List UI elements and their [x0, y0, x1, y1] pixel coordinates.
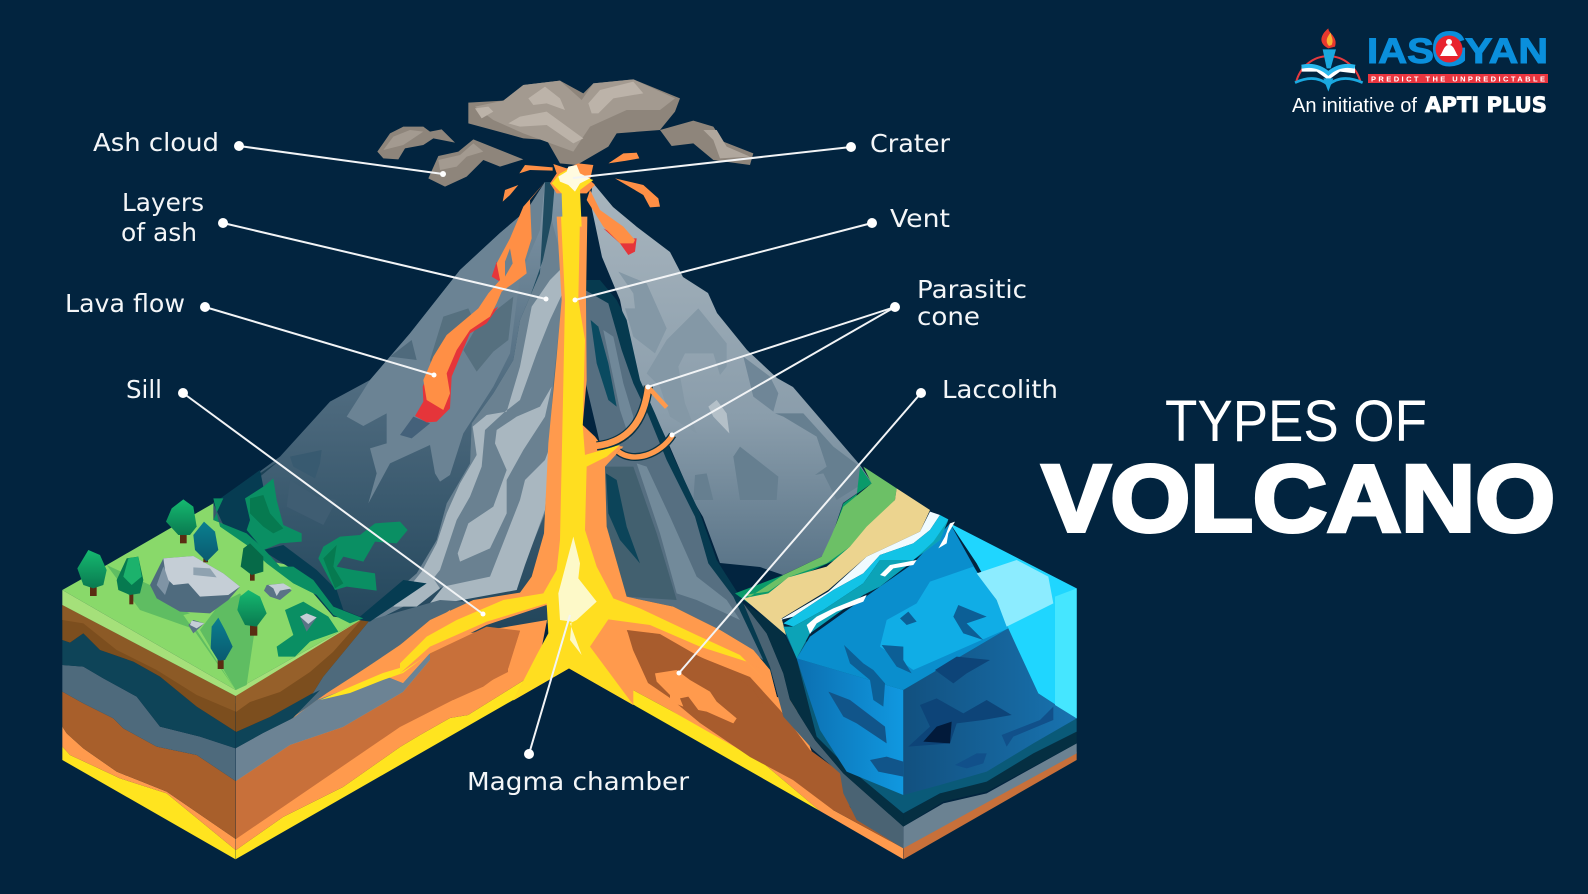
- left block: left face layers: [62, 605, 236, 859]
- logo: IAS GYAN: YAN: [1465, 32, 1548, 71]
- dark sea floor shapes: [908, 698, 1012, 747]
- label: Lava flow: [65, 289, 436, 378]
- label: Magma chamber: [467, 615, 690, 796]
- title: [1042, 389, 1555, 552]
- white chamber core: [558, 537, 597, 655]
- ash clouds: [377, 79, 753, 187]
- right block: right face layers: [569, 598, 903, 859]
- vent-side dark edge: [363, 182, 555, 620]
- label: Layers of ash: [121, 188, 548, 302]
- surf: [780, 512, 940, 620]
- sand beach: [743, 488, 930, 635]
- grass shades: [107, 565, 236, 690]
- trees: [90, 585, 97, 596]
- logo: IAS GYAN: PREDICT THE UNPREDICTABLE: [1371, 74, 1545, 84]
- brown patch right: [627, 631, 763, 705]
- title: VOLCANO: [1042, 446, 1555, 552]
- ocean block: [735, 467, 1077, 859]
- label: Vent: Vent: [890, 204, 950, 233]
- magma conduit and chamber: [400, 217, 777, 723]
- logo: IAS GYAN: APTI PLUS: [1425, 93, 1547, 117]
- laccolith: [655, 670, 737, 723]
- grass top of left block: [62, 470, 427, 696]
- seabed layers: [903, 752, 1077, 859]
- right flank of mountain: [590, 183, 872, 575]
- label: Ash cloud: Ash cloud: [93, 128, 219, 157]
- label: Parasitic cone: [646, 275, 1027, 438]
- icon: torch and open book: [1295, 28, 1363, 92]
- brown patch left: [430, 627, 520, 700]
- label: Lava flow: Lava flow: [65, 289, 185, 318]
- label: Crater: [573, 129, 951, 178]
- label: Laccolith: [676, 375, 1058, 676]
- dark slope behind grass: [213, 470, 427, 622]
- small rocks: [264, 583, 292, 600]
- sill yellow band: [320, 635, 450, 700]
- icon: meditating figure: [1436, 36, 1462, 62]
- label: Ash cloud: [93, 128, 446, 177]
- green shore: [735, 467, 872, 607]
- volcano illustration: [62, 79, 1077, 859]
- lava flow: [492, 262, 505, 282]
- label: Layers of ash: Layers: [122, 188, 204, 217]
- tagline: [1368, 74, 1548, 83]
- wordmark: IAS: [1367, 32, 1434, 71]
- label: Crater: Crater: [870, 129, 951, 158]
- dark green jags: [213, 498, 363, 623]
- label: Vent: [572, 204, 950, 302]
- left block: right face layers: [236, 600, 569, 859]
- label: Magma chamber: Magma chamber: [467, 767, 690, 796]
- yellow magma core: [400, 217, 772, 705]
- lava at crater: [503, 153, 660, 255]
- big rock: [150, 556, 240, 613]
- logo: IAS GYAN: An initiative of: [1292, 95, 1417, 117]
- left flank of mountain: [213, 182, 563, 703]
- title: TYPES OF: [1165, 389, 1427, 454]
- sill orange band: [293, 610, 450, 717]
- label: Sill: [126, 375, 486, 616]
- label: Sill: Sill: [126, 375, 162, 404]
- label: Laccolith: Laccolith: [942, 375, 1058, 404]
- logo: IAS GYAN: [1292, 21, 1548, 117]
- logo: IAS GYAN: G: [1431, 21, 1468, 77]
- orange conduit: [400, 217, 777, 705]
- label: Parasitic cone: cone: [917, 302, 980, 331]
- water faces: [783, 588, 1077, 813]
- cross-section right of vent: [585, 280, 777, 700]
- label: Layers of ash: of ash: [121, 218, 197, 247]
- label: Parasitic cone: Parasitic: [917, 275, 1027, 304]
- grey strip bands: [367, 220, 563, 620]
- parasitic branches: [597, 386, 648, 446]
